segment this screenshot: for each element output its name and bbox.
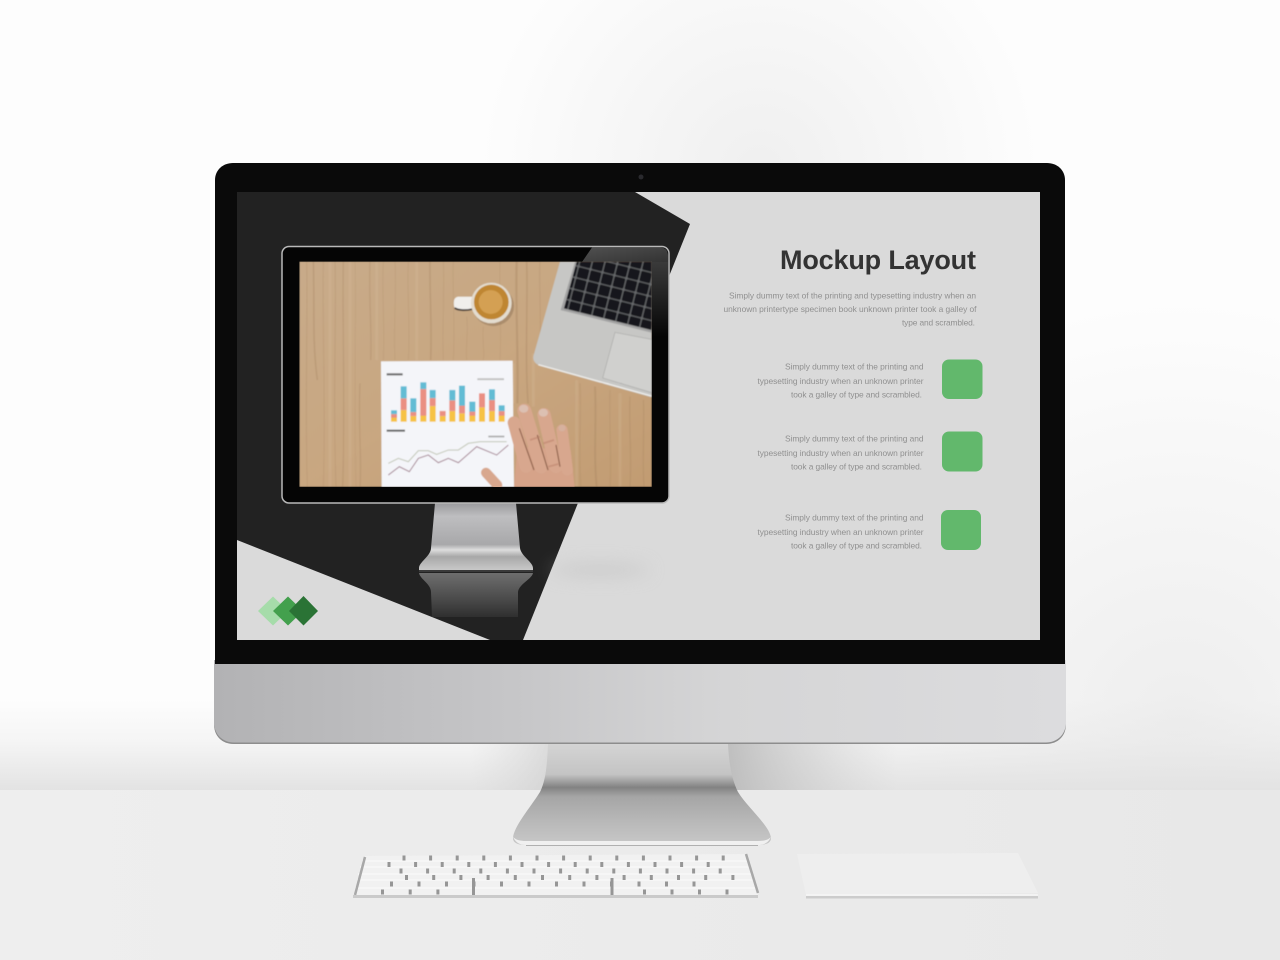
intro text block — [724, 290, 977, 328]
monitor — [214, 163, 1066, 744]
laptop — [533, 262, 652, 397]
monitor stand — [513, 744, 771, 846]
text block: item 1: typesetting industry when an unknown printer — [758, 376, 924, 386]
icon tile: item 1 — [942, 360, 982, 399]
monitor chin — [214, 660, 1066, 744]
text block: item 2: took a galley of type and scrambled. — [791, 462, 922, 472]
monitor black bezel — [215, 163, 1065, 664]
mini monitor with photo — [282, 246, 669, 503]
mini monitor floor shadow — [550, 564, 650, 576]
intro text block: unknown printertype specimen book unknown printer took a galley of — [724, 304, 977, 314]
mini monitor glare — [582, 248, 668, 262]
text block: item 1: took a galley of type and scrambled. — [791, 390, 922, 400]
monitor shadow on wall, left of stand — [470, 744, 548, 790]
paper with charts — [381, 361, 514, 487]
photo — [299, 262, 652, 487]
slide background — [237, 192, 1040, 640]
finger gaps — [519, 428, 560, 470]
hand — [486, 405, 575, 487]
stand reflection — [419, 573, 533, 617]
mini monitor stand — [419, 503, 533, 617]
line chart — [388, 442, 508, 475]
text block: item 2: Simply dummy text of the printing and — [785, 434, 924, 444]
text block: item 3 — [758, 512, 924, 550]
webcam — [638, 174, 644, 180]
coffee cup — [454, 283, 514, 326]
text block: item 2 — [758, 434, 924, 472]
text block: item 3: Simply dummy text of the printing and — [785, 512, 924, 522]
mini monitor frame — [282, 246, 669, 503]
key row highlights — [355, 861, 756, 888]
icon tile: item 3 — [941, 510, 981, 550]
trackpad — [797, 853, 1038, 898]
keyboard — [353, 854, 758, 898]
intro text block: Simply dummy text of the printing and typesetting industry when an — [729, 290, 976, 300]
icon tile: item 2 — [942, 432, 982, 472]
text block: item 3: typesetting industry when an unknown printer — [758, 527, 924, 537]
background: desk — [0, 790, 1280, 960]
mini monitor side glare — [652, 262, 668, 337]
finger nails — [519, 405, 528, 413]
slide dark angled shape — [237, 192, 690, 640]
stacked bar chart — [391, 382, 505, 422]
text block: item 1: Simply dummy text of the printing and — [785, 362, 924, 372]
heading: Mockup Layout — [780, 245, 976, 275]
wood pale streaks — [576, 402, 621, 486]
wood table — [299, 262, 652, 487]
text block: item 3: took a galley of type and scrambled. — [791, 540, 922, 550]
monitor shadow on wall, right of stand — [728, 744, 898, 790]
text block: item 1 — [758, 362, 924, 400]
key gaps — [381, 858, 735, 895]
text block: item 2: typesetting industry when an unknown printer — [758, 448, 924, 458]
slide screen — [237, 192, 1040, 640]
knuckle shading — [530, 437, 558, 467]
logo: three green diamonds — [258, 596, 318, 626]
intro text block: type and scrambled. — [902, 318, 975, 328]
